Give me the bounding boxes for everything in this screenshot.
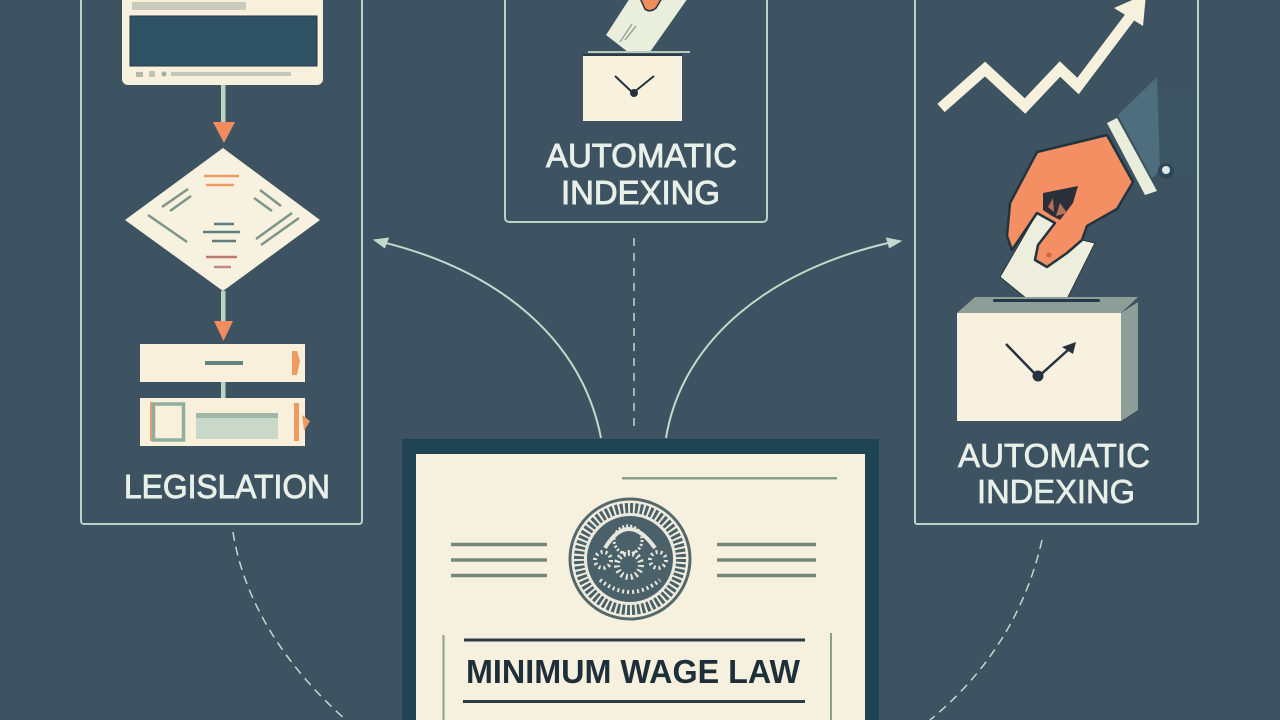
icon: check arrow <box>1006 342 1076 382</box>
label: automatic indexing centre <box>546 137 737 211</box>
arrow: window to decision <box>213 85 235 143</box>
panel: centre automatic indexing <box>505 0 767 222</box>
icon: step box two <box>140 398 310 446</box>
title rules <box>463 640 805 702</box>
arrow: decision to steps <box>214 291 233 341</box>
panel: legislation <box>81 0 362 524</box>
title frame side rules <box>444 633 831 720</box>
palm shadow <box>1043 186 1078 220</box>
document title: MINIMUM WAGE LAW <box>466 653 801 690</box>
seal side lines right <box>717 544 816 576</box>
connector: curved arrow to legislation panel <box>374 238 601 438</box>
panel: right automatic indexing <box>915 0 1198 524</box>
cuff <box>1107 118 1157 195</box>
seal side lines left <box>451 544 547 576</box>
connector: dashed line to centre panel <box>633 238 635 432</box>
ballot paper <box>1000 213 1095 299</box>
cuff button <box>1158 163 1174 179</box>
label: automatic indexing right: INDEXING <box>977 473 1135 510</box>
connector: dashed curve from right panel to document <box>930 540 1042 720</box>
label: automatic indexing centre: AUTOMATIC <box>546 137 737 174</box>
seal <box>570 499 690 619</box>
label: automatic indexing centre: INDEXING <box>561 174 720 211</box>
icon: ballot box large <box>957 297 1138 421</box>
connector: dashed curve from left panel to document <box>233 532 346 720</box>
icon: decision diamond <box>125 148 320 291</box>
link between step boxes <box>221 382 226 398</box>
panel: minimum wage law document <box>402 439 879 720</box>
hand <box>1007 135 1133 267</box>
sleeve shadow <box>1155 92 1193 177</box>
icon: document window <box>122 0 323 85</box>
icon: rising trend arrow <box>941 0 1146 108</box>
icon: hand casting ballot <box>1000 77 1193 299</box>
sleeve <box>1118 77 1160 178</box>
document top rule <box>622 477 837 480</box>
label: automatic indexing right: AUTOMATIC <box>958 437 1150 474</box>
connector: curved arrow to right indexing panel <box>666 238 901 438</box>
label: legislation: LEGISLATION <box>124 468 330 505</box>
icon: step box one <box>140 344 305 382</box>
label: automatic indexing right <box>958 437 1150 510</box>
icon: ballot box small <box>583 0 690 121</box>
